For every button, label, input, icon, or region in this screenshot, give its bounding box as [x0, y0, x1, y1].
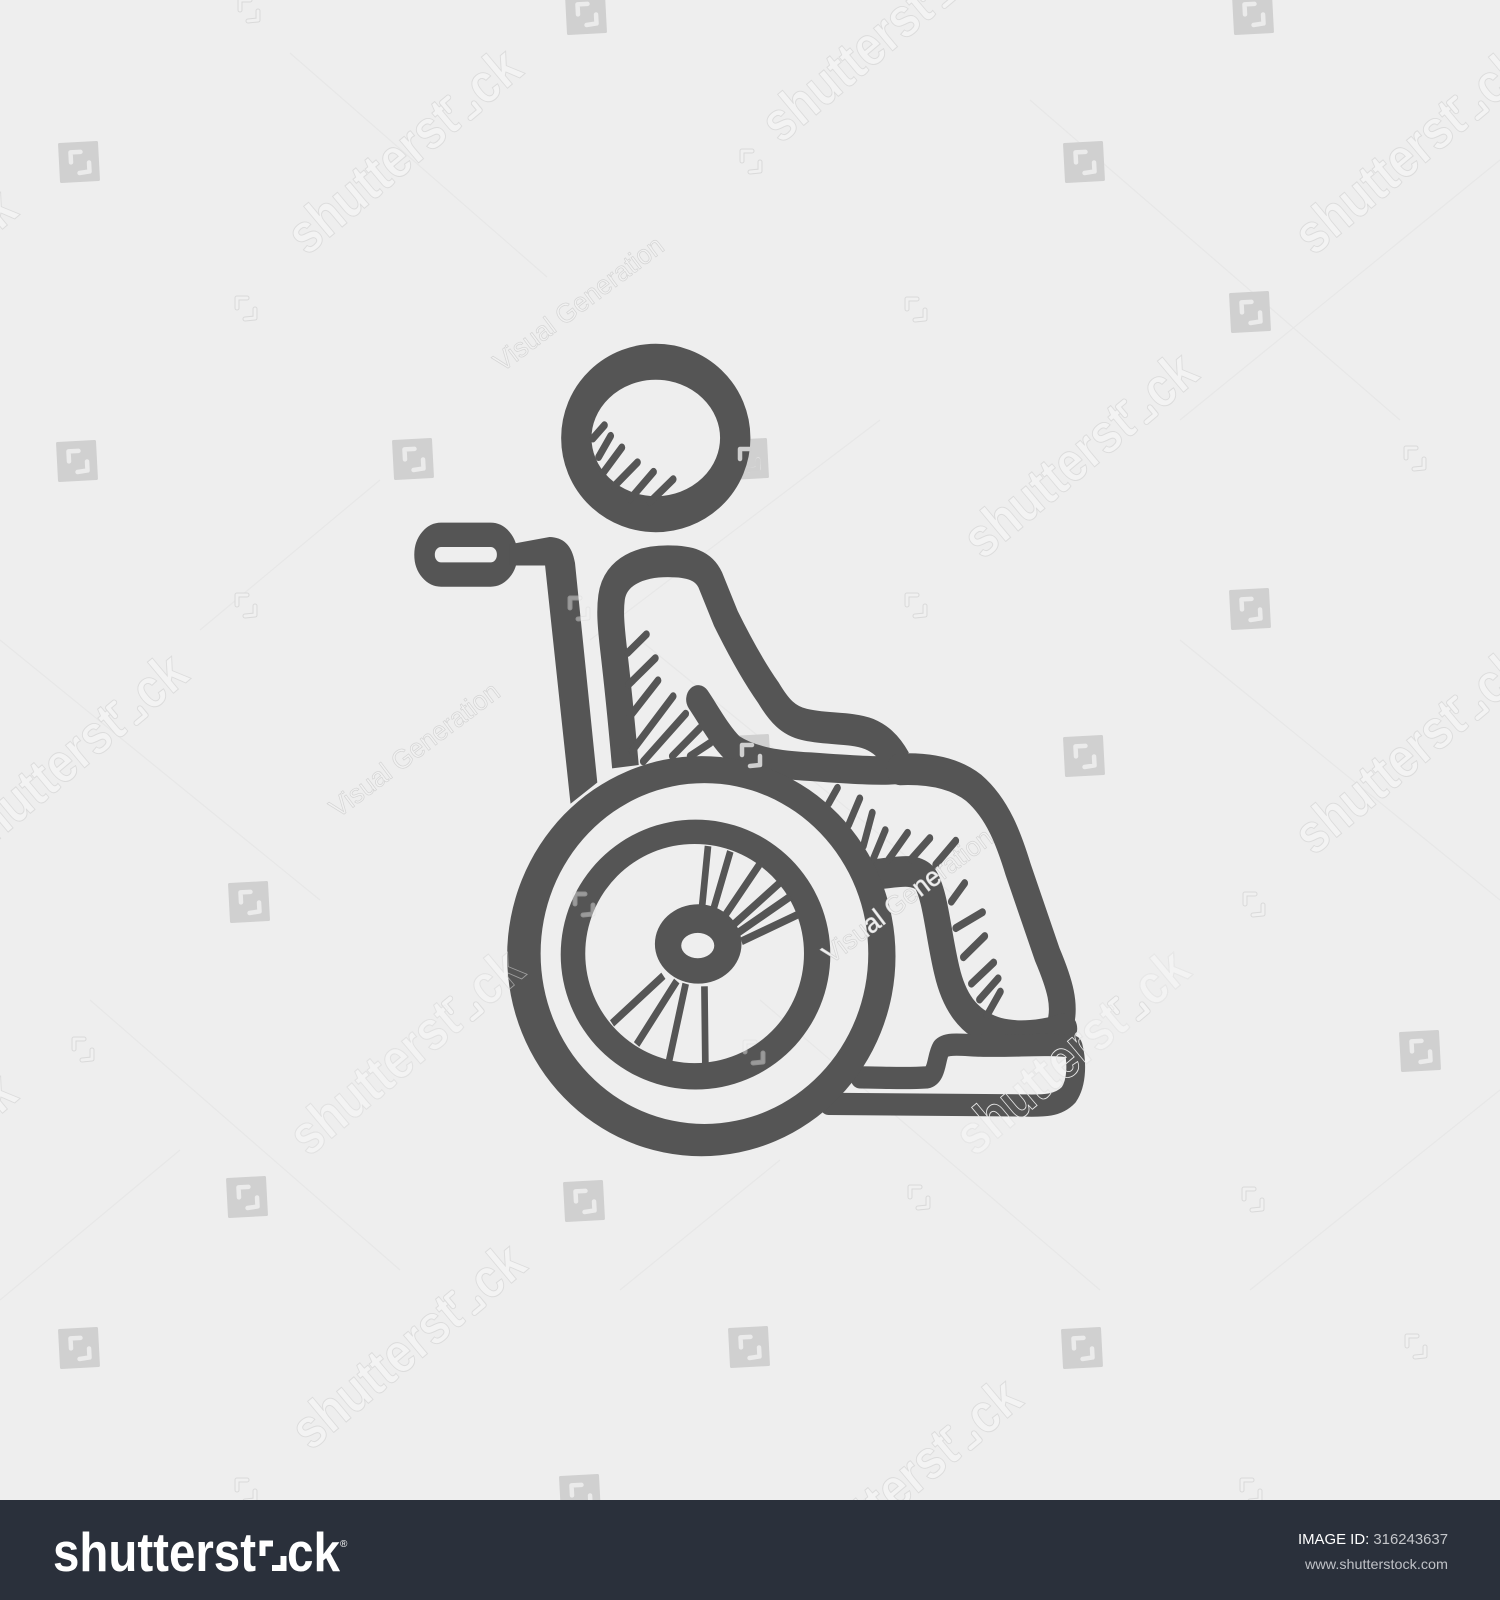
watermark: shutterstock text repeats: shutterstock	[942, 935, 1201, 1167]
icon: leg	[829, 769, 1064, 1036]
footer bar	[0, 1500, 1500, 1600]
icon: wheel hub	[655, 904, 741, 984]
watermark overlay on figure: shutterstock	[276, 935, 535, 1167]
watermark: shutterstock text repeats: Visual Generation	[488, 230, 669, 377]
image id: IMAGE ID: 316243637	[1298, 1531, 1448, 1548]
icon: spokes	[612, 846, 797, 1063]
watermark overlay on figure	[276, 449, 1201, 1167]
footer logo: ®	[340, 1539, 348, 1550]
watermark: shutterstock text repeats: shutterstock	[278, 1229, 537, 1461]
watermark: shutterstock text repeats: Visual Generation	[324, 676, 505, 823]
watermark overlay on figure: shutterstock	[942, 935, 1201, 1167]
icon: footrest	[829, 1045, 1076, 1106]
icon: push handle and frame	[425, 535, 597, 804]
watermark overlay on figure: Visual Generation	[817, 822, 998, 969]
icon: arm	[698, 699, 904, 770]
icon: torso	[611, 561, 898, 767]
website: www.shutterstock.com	[1304, 1556, 1448, 1572]
watermark: shutterstock text repeats: shutterstock	[950, 338, 1209, 570]
icon: head	[576, 362, 735, 514]
footer logo: shutterst	[53, 1521, 256, 1583]
icon: person in wheelchair	[425, 362, 1076, 1156]
watermark: shutterstock text repeats: shutterstock	[274, 34, 533, 266]
icon: wheel tyre	[507, 756, 896, 1156]
watermark: shutterstock text repeats: shutterstock	[774, 1364, 1033, 1596]
watermark: shutterstock text repeats: shutterstock	[276, 935, 535, 1167]
footer logo: ck	[287, 1521, 340, 1583]
icon: wheel rim	[561, 820, 830, 1090]
